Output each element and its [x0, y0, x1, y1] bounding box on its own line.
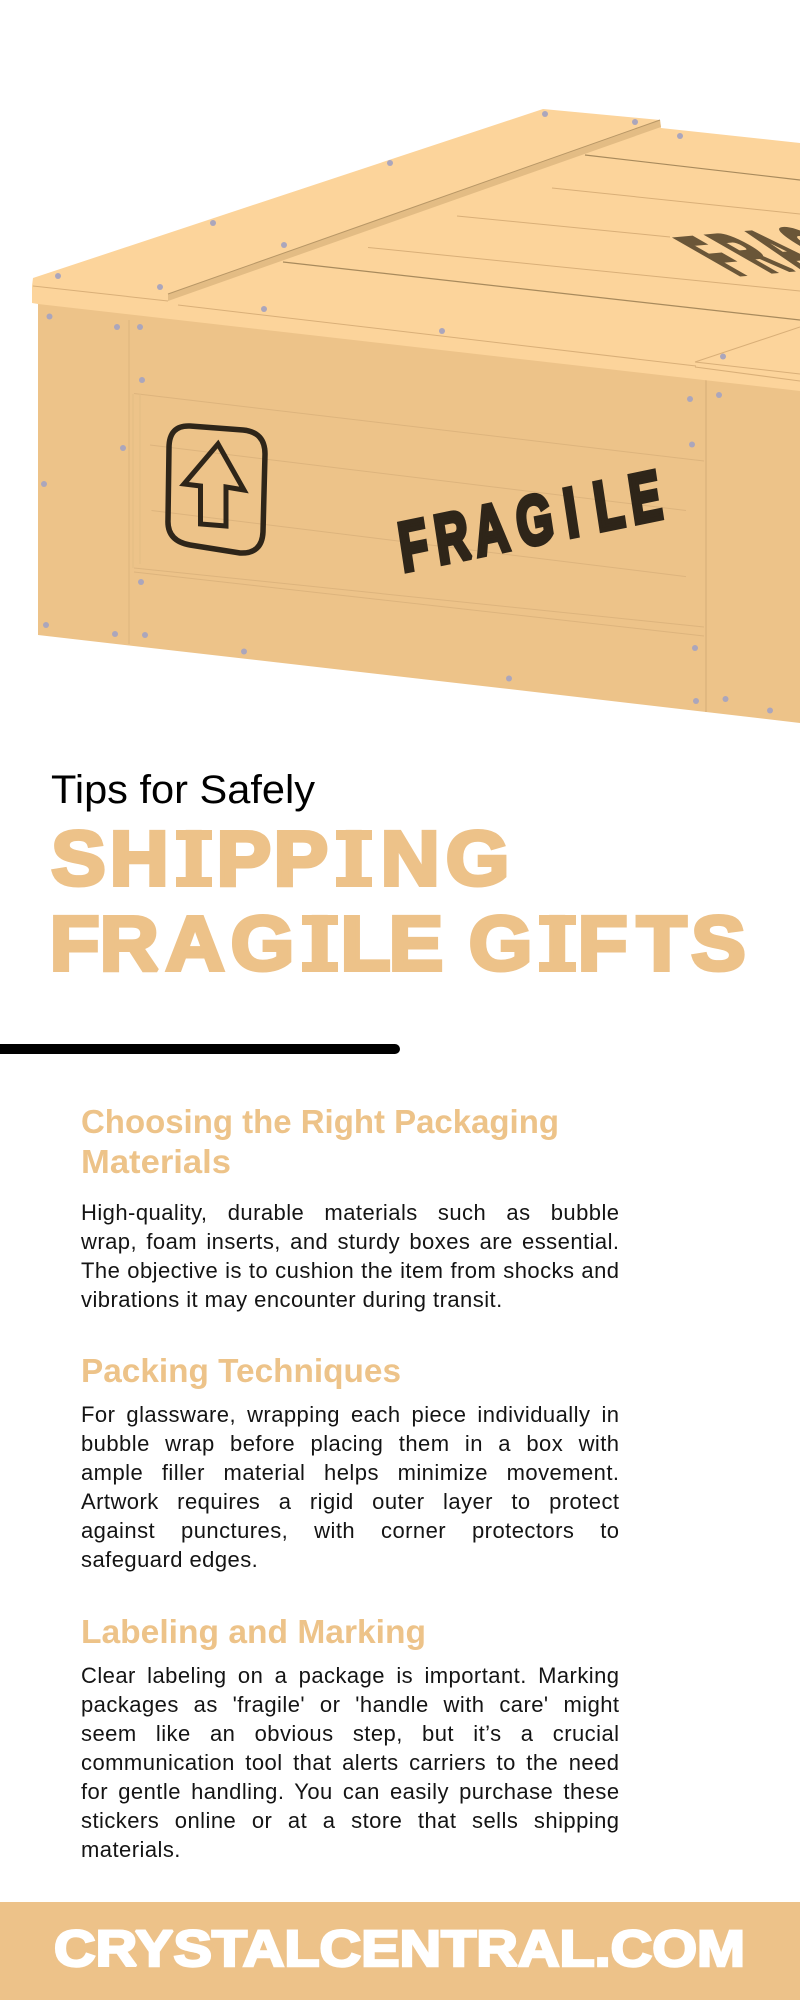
paragraph: labeling and marking: stickers online or at a store that sells shipping [81, 1808, 620, 1833]
section headings [81, 1103, 559, 1650]
paragraph: packing techniques: Artwork requires a rigid outer layer to protect [81, 1489, 620, 1514]
crate lid top [32, 109, 800, 391]
paragraph: labeling and marking: Clear labeling on a package is important. Marking [81, 1663, 620, 1688]
paragraph: packaging materials: The objective is to cushion the item from shocks and [81, 1258, 620, 1283]
paragraph: packing techniques: For glassware, wrapping each piece individually in [81, 1402, 620, 1427]
crate front face [38, 300, 800, 723]
icon: this way up arrow [168, 426, 265, 553]
paragraph: packaging materials [81, 1200, 620, 1312]
paragraph: packing techniques: ample filler material helps minimize movement. [81, 1460, 620, 1485]
heading: Choosing the Right Packaging Materials: Choosing the Right Packaging [81, 1103, 559, 1140]
nails [41, 111, 773, 714]
paragraph: labeling and marking: for gentle handling. You can easily purchase these [81, 1779, 620, 1804]
paragraph: packaging materials: wrap, foam inserts, and sturdy boxes are essential. [81, 1229, 620, 1254]
paragraph: packaging materials: vibrations it may encounter during transit. [81, 1287, 503, 1312]
title line 1: Tips for Safely [51, 768, 315, 812]
paragraph: labeling and marking: communication tool that alerts carriers to the need [81, 1750, 620, 1775]
heading: Choosing the Right Packaging Materials: Materials [81, 1143, 231, 1180]
paragraph: packaging materials: High-quality, durable materials such as bubble [81, 1200, 620, 1225]
footer website text: CRYSTALCENTRAL.COM [54, 1920, 745, 1977]
paragraph: labeling and marking [81, 1663, 620, 1862]
title [50, 768, 746, 986]
paragraph: labeling and marking: seem like an obvious step, but it’s a crucial [81, 1721, 620, 1746]
heading: Labeling and Marking: Labeling and Marking [81, 1613, 426, 1650]
title line 2: SHIPPING [51, 815, 509, 901]
divider bar [0, 1044, 400, 1054]
front stencil: FRAGILE: FRAGILE [394, 456, 666, 587]
paragraph: packing techniques [81, 1402, 620, 1572]
heading: Packing Techniques: Packing Techniques [81, 1352, 401, 1389]
title line 3: FRAGILE GIFTS [50, 900, 746, 986]
paragraph: labeling and marking: materials. [81, 1837, 181, 1862]
paragraph: packing techniques: against punctures, with corner protectors to [81, 1518, 620, 1543]
heading: Choosing the Right Packaging Materials [81, 1103, 559, 1180]
paragraph: packing techniques: bubble wrap before placing them in a box with [81, 1431, 620, 1456]
illustration: wooden crate [32, 109, 800, 723]
footer band [0, 1902, 800, 2000]
paragraph: labeling and marking: packages as 'fragile' or 'handle with care' might [81, 1692, 620, 1717]
paragraph: packing techniques: safeguard edges. [81, 1547, 258, 1572]
